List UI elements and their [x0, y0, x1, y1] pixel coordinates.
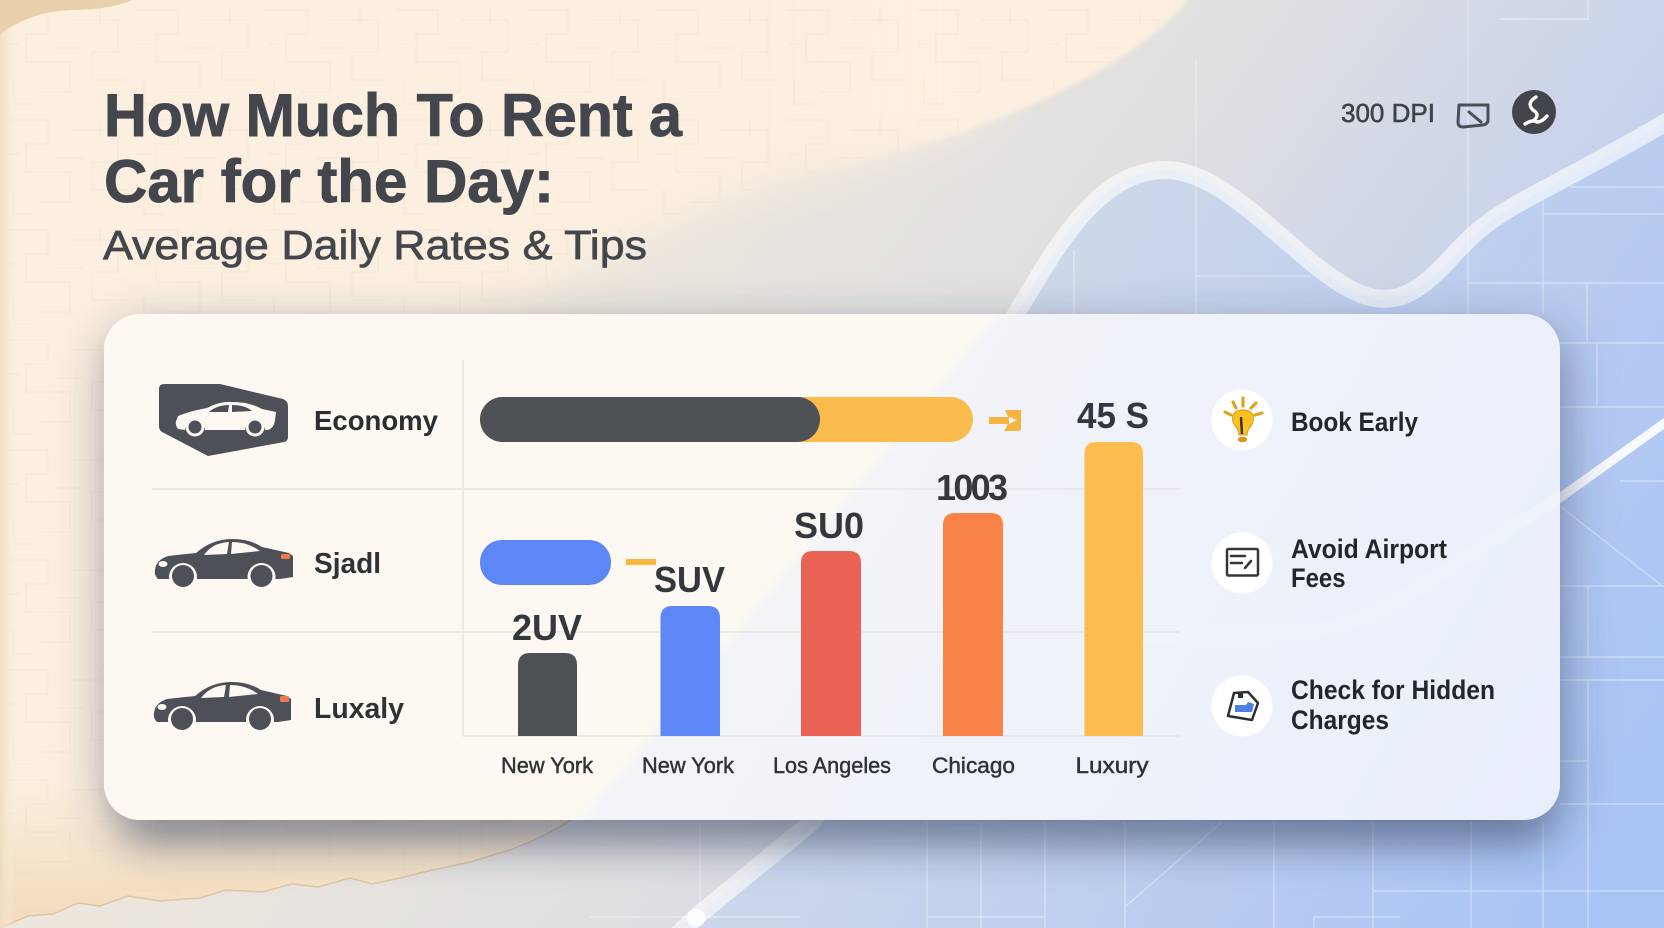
label: Book Early: Book Early [1291, 407, 1418, 437]
chart gridlines [152, 360, 1180, 736]
label: Check for Hidden Charges: Charges [1291, 705, 1389, 735]
bar: Chicago orange [943, 513, 1003, 736]
card drop shadow [130, 806, 1540, 842]
tip: Check for Hidden Charges [1212, 675, 1495, 736]
bar axis labels: Luxury [1076, 753, 1148, 778]
bar value labels [512, 395, 1149, 648]
label: Avoid Airport Fees: Fees [1291, 563, 1346, 593]
title block [103, 82, 683, 268]
dash marker [626, 559, 656, 565]
main card panel [90, 300, 1570, 830]
label: Check for Hidden Charges [1291, 675, 1495, 735]
tip: Avoid Airport Fees [1212, 532, 1447, 594]
icon: luxury car [154, 682, 291, 734]
bar: New York blue [660, 606, 720, 736]
icon: lightbulb [1212, 390, 1272, 450]
tip: Book Early [1212, 390, 1418, 450]
bar axis labels: New York [501, 753, 594, 778]
bar axis labels: Chicago [932, 753, 1015, 778]
bar: Luxury yellow [1084, 442, 1143, 736]
icon: price tag [1212, 676, 1272, 736]
icon: yellow arrow [989, 410, 1021, 431]
title block: Average Daily Rates & Tips [103, 222, 647, 268]
bar value labels: SU0 [794, 505, 864, 546]
icon: economy car badge [159, 384, 288, 456]
bar axis labels: New York [642, 753, 735, 778]
bar value labels: 2UV [512, 607, 582, 648]
header badge: 300 DPI [1341, 90, 1556, 134]
bar: Los Angeles red [801, 551, 861, 736]
decorative white trend line [672, 114, 1664, 928]
bar axis labels [501, 753, 1148, 778]
icon: note [1212, 532, 1272, 594]
label: Check for Hidden Charges: Check for Hidden [1291, 675, 1495, 705]
bar value labels: 1003 [936, 467, 1008, 508]
label: Economy: Economy [314, 405, 438, 436]
label: Sjadl: Sjadl [314, 548, 381, 580]
label: Avoid Airport Fees [1291, 534, 1447, 593]
car row: Economy [159, 384, 438, 456]
car row: Sjadl [155, 539, 381, 591]
torn paper background [0, 0, 1240, 928]
bar axis labels: Los Angeles [773, 753, 891, 778]
icon: sedan car [155, 539, 293, 591]
label: Luxaly: Luxaly [314, 693, 404, 725]
label: Avoid Airport Fees: Avoid Airport [1291, 534, 1447, 564]
bar chart [501, 395, 1149, 778]
icon: dark round badge [1512, 90, 1556, 134]
header badge: 300 DPI: 300 DPI [1341, 98, 1435, 128]
car row: Luxaly [154, 682, 404, 734]
title block: How Much To Rent a [104, 82, 683, 149]
bar value labels: 45 S [1077, 395, 1149, 436]
bar value labels: SUV [654, 559, 725, 600]
title block: Car for the Day: [104, 148, 554, 215]
horizontal bar: blue [480, 540, 611, 585]
horizontal bar: economy [480, 397, 973, 442]
icon: tablet [1458, 105, 1488, 127]
bar: New York dark [518, 653, 577, 736]
